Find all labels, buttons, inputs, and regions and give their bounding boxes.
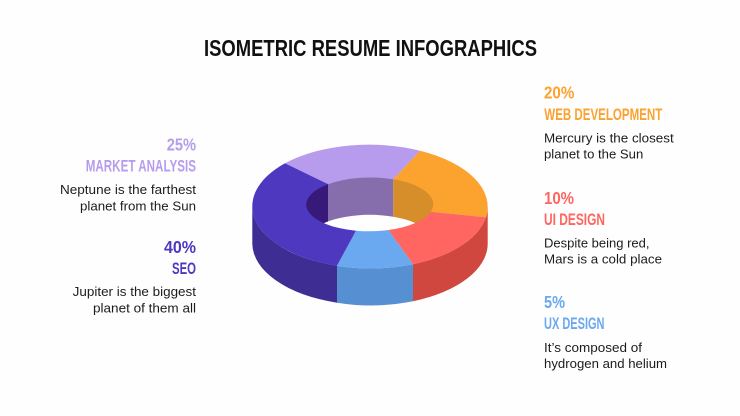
inner walls of the hole bbox=[306, 178, 434, 224]
block: UI design: 10% bbox=[544, 188, 574, 208]
top segment: UX design 5% bbox=[337, 230, 413, 268]
block: market analysis: Neptune is the farthest bbox=[60, 182, 196, 197]
infographic canvas bbox=[61, 40, 674, 370]
block: UI design: Mars is a cold place bbox=[544, 251, 662, 266]
block: web development: Mercury is the closest bbox=[544, 131, 674, 146]
block: UI design: UI DESIGN bbox=[544, 211, 605, 229]
block: UX design: It’s composed of bbox=[544, 340, 642, 355]
outer wall: UX design bbox=[337, 264, 413, 305]
block: SEO: planet of them all bbox=[93, 301, 196, 316]
block: web development: WEB DEVELOPMENT bbox=[544, 106, 662, 124]
top segment: web development 20% bbox=[393, 151, 488, 217]
block: market analysis: 25% bbox=[167, 135, 196, 155]
top segment: UI design 10% bbox=[388, 212, 486, 264]
block: SEO bbox=[73, 237, 196, 316]
block: UX design: 5% bbox=[544, 292, 565, 312]
block: SEO: SEO bbox=[172, 260, 196, 278]
top segment: market analysis 25% bbox=[285, 145, 420, 184]
block: web development bbox=[544, 82, 674, 162]
block: market analysis: planet from the Sun bbox=[80, 199, 196, 214]
block: market analysis: MARKET ANALYSIS bbox=[86, 158, 196, 176]
block: SEO: Jupiter is the biggest bbox=[73, 284, 196, 299]
block: UX design: UX DESIGN bbox=[544, 315, 604, 333]
isometric donut chart bbox=[252, 145, 488, 305]
block: web development: 20% bbox=[544, 82, 575, 102]
outer wall: UI design bbox=[413, 207, 488, 301]
block: UI design: Despite being red, bbox=[544, 235, 650, 250]
block: UI design bbox=[544, 188, 662, 266]
block: UX design: hydrogen and helium bbox=[544, 356, 667, 371]
block: UX design bbox=[544, 292, 667, 371]
title: ISOMETRIC RESUME INFOGRAPHICS bbox=[204, 35, 537, 61]
block: SEO: 40% bbox=[164, 237, 196, 257]
block: market analysis bbox=[60, 135, 196, 214]
outer wall: SEO bbox=[252, 207, 337, 303]
top segment: SEO 40% bbox=[252, 163, 356, 266]
block: web development: planet to the Sun bbox=[544, 147, 643, 162]
